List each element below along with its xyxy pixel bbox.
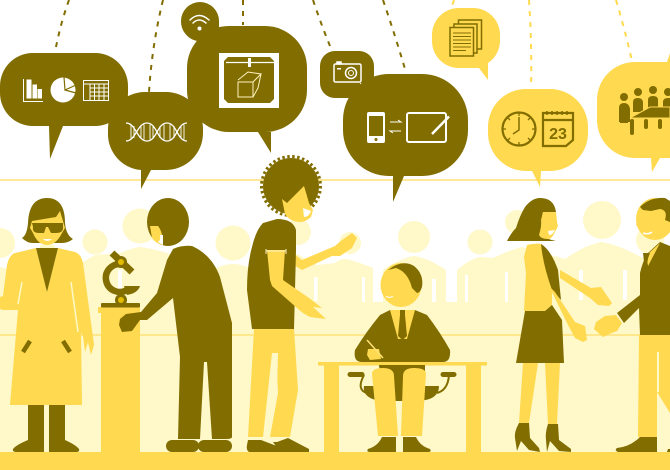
background crowd xyxy=(0,201,670,452)
tie xyxy=(398,310,407,340)
sunglasses xyxy=(32,223,63,233)
icon: calendar: 23 xyxy=(549,126,567,143)
person: woman shaking hands xyxy=(507,198,612,452)
suit xyxy=(617,242,670,335)
person: woman in lab coat xyxy=(0,198,94,452)
person: man bending over microscope xyxy=(119,198,232,452)
legs xyxy=(372,368,398,436)
far arm xyxy=(560,270,612,306)
speech bubble: charts xyxy=(0,53,128,159)
torso xyxy=(524,244,552,311)
desk xyxy=(318,362,487,452)
trousers xyxy=(248,329,298,437)
icon: 3D printer xyxy=(219,53,279,108)
icon: stacked documents xyxy=(450,20,482,56)
horizon lines xyxy=(0,180,670,335)
face xyxy=(539,212,558,239)
dashed connectors xyxy=(56,0,632,92)
icon: spreadsheet table xyxy=(84,80,108,100)
collar xyxy=(40,245,55,251)
icon: tablet and stylus xyxy=(407,113,449,142)
pedestal xyxy=(98,307,140,452)
legs xyxy=(519,363,538,423)
trousers xyxy=(638,335,670,437)
person: man with afro xyxy=(247,156,357,452)
near arm xyxy=(549,286,587,342)
face xyxy=(282,186,313,222)
shoes xyxy=(616,437,657,452)
suit xyxy=(355,310,450,362)
icon: bar chart xyxy=(24,79,43,102)
far arm xyxy=(293,233,357,270)
icon: meeting table xyxy=(619,86,670,135)
chair xyxy=(350,374,454,393)
skirt xyxy=(516,305,564,363)
high heels xyxy=(515,423,540,452)
floor xyxy=(0,452,670,470)
hair xyxy=(22,198,73,243)
speech bubble: phone and tablet xyxy=(343,74,468,202)
icon: smartphone xyxy=(367,112,385,143)
icon: camera xyxy=(334,62,361,82)
speech bubble: DNA xyxy=(108,92,203,189)
hand xyxy=(594,315,622,337)
person: seated man at desk xyxy=(350,263,454,452)
hand and pen xyxy=(367,349,381,360)
head xyxy=(636,198,670,240)
speech bubble: 3D printer xyxy=(187,26,307,153)
shoes xyxy=(367,437,396,452)
pockets xyxy=(23,341,70,352)
hair xyxy=(507,198,556,241)
speech bubble: camera xyxy=(320,51,374,98)
icon: DNA helix xyxy=(126,123,187,141)
face xyxy=(30,211,65,245)
icon: clock xyxy=(502,112,536,146)
legs and shoes xyxy=(13,405,79,452)
speech bubble: meeting xyxy=(597,53,670,172)
speech bubble: clock and calendar xyxy=(488,89,588,187)
shirt xyxy=(390,310,415,339)
head xyxy=(380,263,422,307)
coat xyxy=(0,248,94,405)
speech bubble: wifi xyxy=(181,2,219,41)
person: man in suit shaking hands xyxy=(594,198,670,452)
icon: microscope xyxy=(101,253,140,308)
icon: wifi xyxy=(190,16,209,30)
shirt xyxy=(247,219,296,329)
shoes xyxy=(247,440,282,452)
shirt and tie xyxy=(646,243,660,270)
speech bubble: documents xyxy=(432,8,500,80)
vest xyxy=(541,244,561,300)
near arm xyxy=(267,250,326,319)
lap xyxy=(379,365,425,400)
icon: pie chart xyxy=(50,77,76,102)
icon: exchange arrows xyxy=(390,120,401,133)
